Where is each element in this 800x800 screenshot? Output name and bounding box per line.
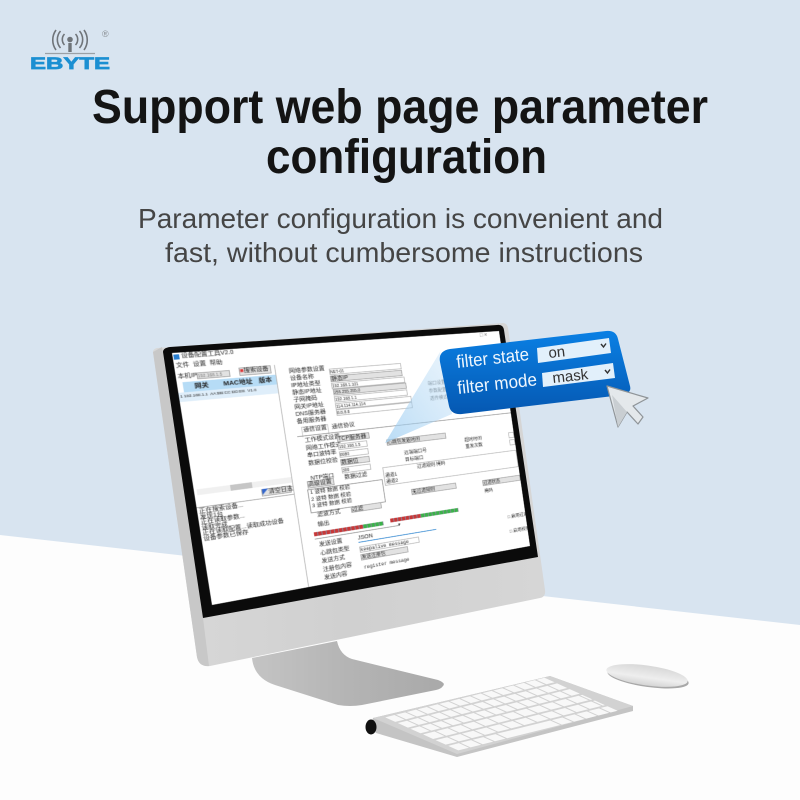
- device parameter form: 255.255.255.0: [334, 388, 361, 395]
- left panel: device search: [177, 365, 292, 495]
- IO settings group: 3 波特 数据 校验: [312, 498, 352, 509]
- device parameter form: 透传模式: [430, 395, 448, 402]
- IO settings group: 通道1: [385, 472, 398, 479]
- device parameter form: 192.168.1.101: [332, 382, 359, 389]
- screen: configuration software window: [172, 331, 530, 605]
- device parameter form: 114.114.114.114: [336, 402, 366, 410]
- device parameter form: 8.8.8.8: [337, 410, 350, 416]
- window title bar: [173, 332, 487, 360]
- message settings: 发送内容: [324, 571, 348, 581]
- clear log button: ◤清空日志: [262, 486, 293, 496]
- log text: 正在搜索设备...: [199, 503, 244, 515]
- left panel: device search: 本机IP:: [177, 372, 200, 380]
- device parameter form: 静态IP地址: [292, 388, 322, 396]
- subtitle: Parameter configuration is convenient and: [138, 203, 663, 234]
- serial settings tabs: 通信协议: [331, 422, 355, 430]
- keyboard keys: [390, 680, 613, 748]
- serial settings form: 网络工作模式: [306, 441, 341, 451]
- subtitle: fast, without cumbersome instructions: [165, 237, 643, 268]
- IO settings group: 高级设置: [308, 479, 332, 488]
- serial settings form: 工作模式设置: [304, 434, 340, 444]
- keyboard: [366, 676, 633, 757]
- label: filter state: filter state: [455, 344, 530, 372]
- IO settings group: 通道2: [386, 479, 399, 485]
- device parameter form: 备用服务器: [296, 416, 327, 425]
- IO settings group: 1 波特 数据 校验: [310, 484, 350, 496]
- IO settings group: 过滤规则 掩码: [417, 461, 446, 470]
- message settings: keepalive message: [360, 539, 409, 553]
- device parameter form: 参数配置: [429, 388, 447, 394]
- logo icon: wireless antenna: [45, 30, 95, 54]
- serial settings form: 300: [342, 468, 350, 473]
- window title bar: □ ×: [479, 333, 487, 338]
- select: mask: [542, 363, 615, 387]
- log panel: [196, 485, 294, 542]
- left panel: device search: 192.168.1.5: [197, 372, 223, 379]
- message settings: ▼: [397, 522, 402, 528]
- device parameter form: 子网掩码: [293, 395, 318, 403]
- log text: 设备参数已保存: [203, 529, 249, 542]
- keyboard end cap: [366, 720, 376, 734]
- device parameter form: 端口设置: [427, 381, 446, 387]
- device parameter form: [288, 363, 448, 425]
- search button: [238, 365, 272, 376]
- menu bar: 文件 设置 帮助: [176, 360, 223, 369]
- monitor black bezel: [163, 325, 538, 618]
- IO settings group: 过滤状态: [483, 479, 501, 486]
- window title bar: 设备配置工具V2.0: [181, 350, 234, 359]
- serial settings form: 目标端口: [405, 456, 424, 463]
- serial settings form: 数据位校验: [308, 457, 338, 466]
- IO settings group: 数据过滤: [344, 472, 368, 480]
- log text: 读取完成: [201, 521, 228, 531]
- message settings: register message: [364, 557, 410, 570]
- device table row: [178, 384, 278, 402]
- device parameter form: NET-01: [330, 369, 345, 375]
- title: Support web page parameter: [92, 81, 708, 134]
- search button: ■搜索设备: [239, 366, 269, 374]
- scrollbar: [197, 477, 292, 495]
- logo: [30, 29, 110, 73]
- monitor body: [153, 323, 545, 666]
- logo wordmark: EBYTE: [30, 54, 110, 73]
- device parameter form: 192.168.1.1: [335, 396, 357, 402]
- zoom beam from screen to popup: [385, 352, 452, 443]
- message settings: 发送注册包: [361, 552, 386, 560]
- device parameter form: 设备名称: [290, 374, 314, 382]
- serial settings form: 8080: [340, 452, 350, 458]
- serial settings form: 串口波特率: [307, 450, 337, 459]
- select: on: [537, 338, 611, 363]
- title: configuration: [266, 131, 547, 184]
- icon: mouse cursor: [607, 386, 648, 427]
- device table header: 网关 MAC地址 版本: [194, 376, 272, 390]
- select: mask: mask: [552, 366, 590, 387]
- device parameter form: 网络参数设置: [289, 366, 325, 374]
- log text: 正在读取配置...读取成功设备: [202, 518, 284, 536]
- monitor stand: [252, 641, 444, 706]
- message settings: JSON: [357, 533, 373, 541]
- select: on: on: [548, 343, 566, 362]
- IO settings group: 过滤: [352, 506, 364, 513]
- serial settings form: 超时时间: [464, 436, 482, 443]
- IO settings group: 输出: [317, 520, 330, 528]
- log text: [198, 502, 284, 542]
- label: filter mode: filter mode: [456, 369, 538, 398]
- message settings: 发送设置: [319, 538, 343, 548]
- serial settings form: 心跳包发送时间: [387, 437, 420, 446]
- title: [92, 81, 708, 184]
- registered mark: ®: [102, 29, 109, 39]
- device parameter form: IP地址类型: [291, 381, 321, 389]
- serial settings form: TCP服务器: [337, 433, 367, 442]
- serial settings form: [304, 432, 516, 481]
- serial settings form: 数据位: [341, 458, 359, 466]
- message settings: 心跳包类型: [320, 546, 350, 556]
- mouse: [605, 660, 690, 693]
- message settings: □ 启用校验: [509, 526, 530, 534]
- device parameter form: 网关IP地址: [294, 402, 324, 410]
- IO settings group: 滤波方式: [317, 509, 341, 518]
- device parameter form: DNS服务器: [295, 409, 326, 418]
- device table header: [182, 375, 277, 392]
- red and green status blocks: [314, 525, 364, 536]
- subtitle: [138, 203, 663, 268]
- log text: 发现1台: [200, 511, 224, 520]
- message settings: [314, 512, 530, 581]
- message settings: 注册包内容: [323, 562, 352, 573]
- popup card: filter settings: [440, 331, 630, 414]
- IO settings group: 掩码: [484, 488, 493, 494]
- IO settings group: 2 波特 数据 校验: [311, 491, 351, 502]
- serial settings form: 远端端口号: [404, 449, 427, 456]
- IO settings group: [306, 450, 521, 536]
- serial settings tabs: [297, 412, 511, 438]
- serial settings tabs: 通信设置: [303, 425, 327, 433]
- device table row: 1 192.168.1.1 AA:BB:CC:DD:EE V1.0: [180, 389, 257, 400]
- message settings: 发送方式: [321, 555, 345, 564]
- log text: 正在读取参数...: [200, 513, 245, 526]
- message settings: □ 启用过滤: [507, 512, 528, 520]
- serial settings form: 重发次数: [465, 443, 483, 450]
- IO settings group: 无过滤规则: [412, 487, 435, 495]
- serial settings form: 192.168.1.5: [339, 443, 361, 450]
- serial settings form: NTP端口: [310, 473, 335, 481]
- device parameter form: 静态IP: [331, 375, 349, 382]
